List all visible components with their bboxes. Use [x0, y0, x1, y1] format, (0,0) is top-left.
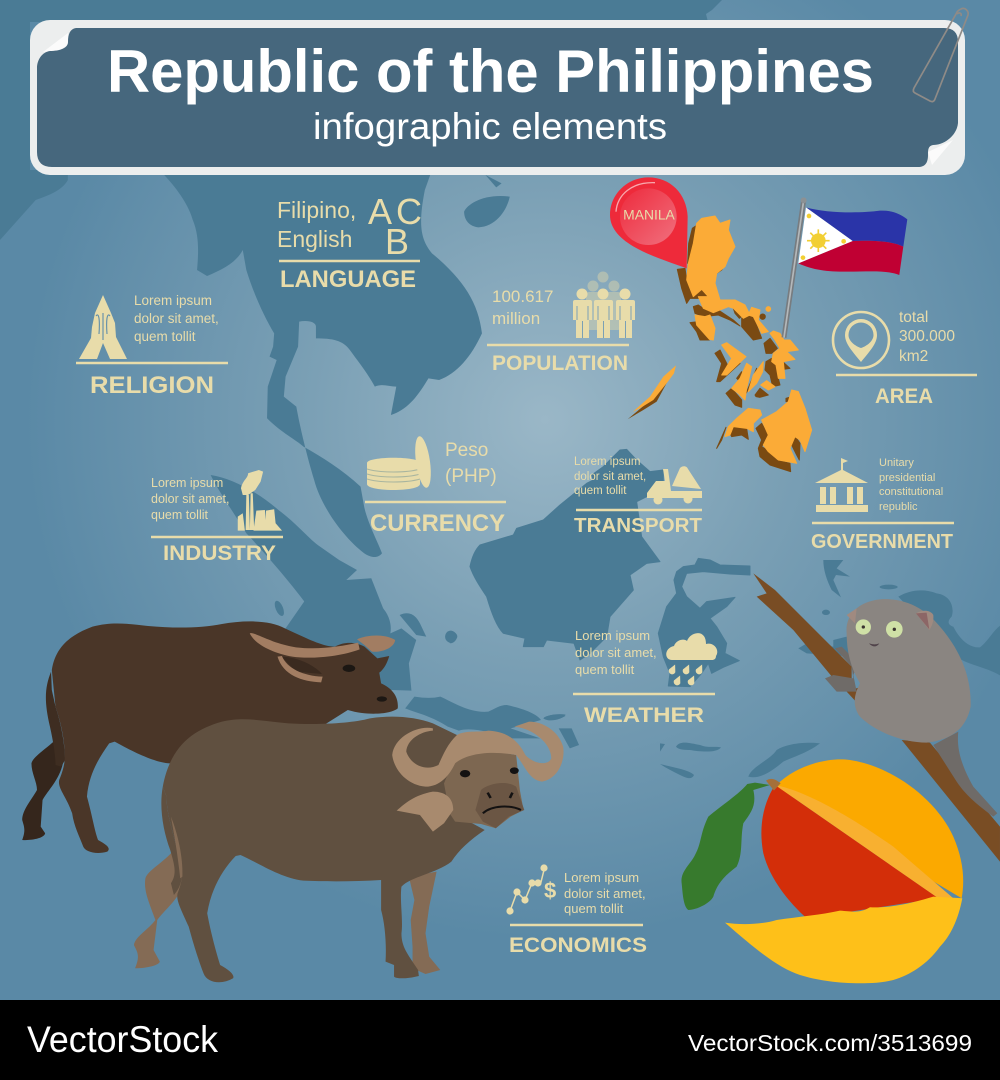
- ear shadow: [281, 657, 322, 674]
- icon: coins: [367, 435, 434, 490]
- religion heading: RELIGION: [90, 372, 214, 399]
- tail: [933, 732, 997, 817]
- map pin Manila: [610, 177, 688, 268]
- language block: English: [277, 226, 352, 252]
- industry block: dolor sit amet,: [151, 492, 230, 506]
- transport block: [574, 456, 702, 537]
- transport block: quem tollit: [574, 485, 627, 497]
- main title: Republic of the Philippines: [107, 38, 874, 105]
- government block: presidential: [879, 472, 935, 484]
- weather text: Lorem ipsum: [575, 628, 650, 643]
- eyes: [856, 619, 903, 638]
- government block: [811, 457, 954, 553]
- tail: [46, 672, 65, 767]
- peeled corner top-left: [43, 33, 68, 52]
- mango orange side: [775, 759, 963, 898]
- icon: factory: [238, 470, 282, 531]
- industry text: Lorem ipsum: [151, 476, 223, 490]
- economics block: quem tollit: [564, 901, 624, 916]
- northern islands: [677, 216, 771, 340]
- subtitle: infographic elements: [313, 106, 667, 147]
- title banner: [30, 8, 968, 175]
- muzzle: [475, 783, 524, 828]
- banner frame: [30, 20, 965, 175]
- economics block: [506, 864, 647, 957]
- currency block: [365, 435, 506, 537]
- northern island shapes: [687, 216, 771, 340]
- religion block: quem tollit: [134, 329, 196, 344]
- transport heading: TRANSPORT: [574, 515, 702, 537]
- economics text: Lorem ipsum: [564, 870, 639, 885]
- language block: [277, 191, 422, 293]
- icon: letters ABC: [368, 191, 422, 262]
- religion text: Lorem ipsum: [134, 293, 212, 308]
- icon: government building: [815, 458, 868, 512]
- weather block: dolor sit amet,: [575, 645, 657, 660]
- mango red side: [761, 785, 938, 918]
- mouth: [869, 643, 879, 646]
- icon: dump truck: [647, 466, 702, 504]
- transport block: dolor sit amet,: [574, 471, 646, 483]
- icon: growth chart with dollar: [506, 864, 556, 915]
- flag cloth: [798, 207, 907, 275]
- body: [163, 717, 485, 982]
- body: [846, 599, 971, 743]
- population text: 100.617: [492, 287, 553, 306]
- tail: [161, 787, 182, 895]
- ear: [397, 792, 453, 832]
- body: [52, 621, 398, 853]
- southern island shadows: [715, 338, 800, 472]
- icon: praying hands: [79, 295, 127, 359]
- currency heading: CURRENCY: [370, 510, 505, 537]
- icon: cloud with rain: [666, 633, 717, 686]
- industry block: quem tollit: [151, 508, 208, 522]
- government block: republic: [879, 501, 918, 513]
- watermark footer: [0, 1000, 1000, 1080]
- flag: [784, 197, 907, 338]
- water buffalo light: [134, 717, 564, 982]
- eye and nostril: [343, 665, 387, 702]
- mango yellow slice: [725, 897, 962, 983]
- transport text: Lorem ipsum: [574, 456, 640, 468]
- water buffalo dark: [22, 621, 398, 853]
- economics block: dolor sit amet,: [564, 886, 646, 901]
- icon: location circle: [833, 312, 889, 368]
- area heading: AREA: [875, 385, 933, 408]
- government block: constitutional: [879, 486, 943, 498]
- pin label: MANILA: [623, 207, 675, 223]
- area text: total: [899, 309, 928, 326]
- southern islands: [715, 331, 812, 472]
- icon: letters ABC: B: [385, 221, 409, 262]
- mouth: [483, 807, 521, 813]
- industry heading: INDUSTRY: [163, 542, 276, 565]
- branch: [753, 573, 1000, 862]
- leaf: [681, 783, 770, 910]
- banner panel: [37, 28, 958, 167]
- nostrils: [488, 793, 512, 798]
- Palawan: [628, 365, 676, 419]
- government heading: GOVERNMENT: [811, 531, 953, 553]
- stem: [766, 779, 781, 791]
- weather block: quem tollit: [575, 662, 635, 677]
- area block: 300.000: [899, 328, 955, 345]
- icon: letters ABC: C: [396, 191, 422, 232]
- currency block: (PHP): [445, 466, 497, 487]
- mango pale band: [775, 785, 953, 898]
- tarsier on branch: [753, 573, 1000, 862]
- icon: letters ABC: A: [368, 191, 392, 232]
- map of southeast Asia: [0, 0, 1000, 778]
- industry block: [151, 470, 283, 565]
- horns: [250, 633, 395, 682]
- language text: Filipino,: [277, 197, 356, 223]
- icon: growth chart with dollar: $: [544, 878, 556, 903]
- horns: [392, 722, 564, 787]
- mango: [681, 759, 963, 983]
- eyes: [460, 767, 519, 777]
- population block: [487, 272, 635, 375]
- area block: km2: [899, 348, 928, 365]
- economics heading: ECONOMICS: [509, 934, 647, 957]
- face: [444, 750, 524, 828]
- weather heading: WEATHER: [584, 704, 704, 727]
- currency text: Peso: [445, 440, 488, 461]
- population heading: POPULATION: [492, 352, 628, 375]
- southern island shapes: [722, 331, 812, 463]
- language heading: LANGUAGE: [280, 266, 416, 293]
- religion block: [76, 293, 228, 399]
- far legs: [134, 850, 440, 974]
- ears: [847, 608, 933, 630]
- flag pole: [784, 197, 807, 338]
- government text: Unitary: [879, 457, 914, 469]
- icon: people: [573, 272, 635, 338]
- hand: [825, 647, 857, 692]
- far hind leg: [22, 740, 63, 840]
- footer url: VectorStock.com/3513699: [688, 1030, 972, 1056]
- population block: million: [492, 309, 540, 328]
- footer logo: VectorStock: [27, 1019, 218, 1060]
- weather block: [573, 628, 717, 727]
- Philippines map: [628, 216, 812, 472]
- northern island shadows: [677, 226, 765, 340]
- peeled corner bottom-right: [928, 140, 953, 165]
- religion block: dolor sit amet,: [134, 311, 219, 326]
- area block: [833, 309, 977, 408]
- icon: paper clip: [913, 8, 968, 102]
